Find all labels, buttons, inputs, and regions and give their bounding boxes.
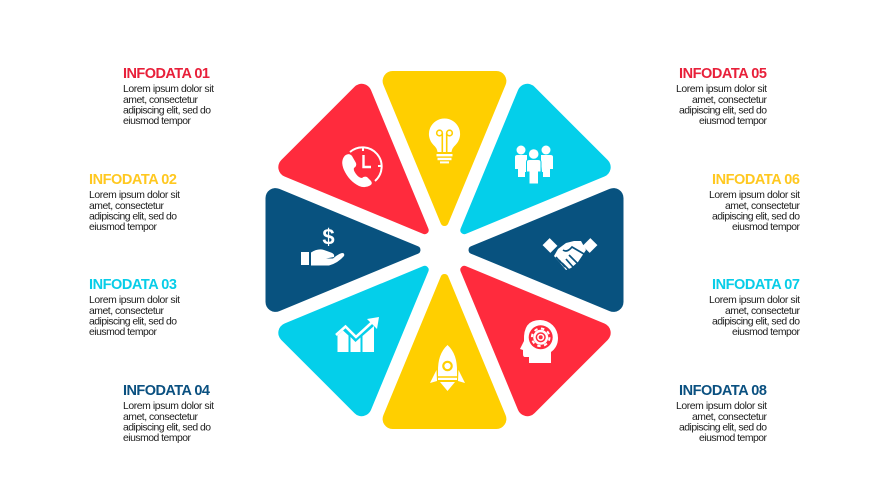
text block: infodata 02: INFODATA 02 [89,172,177,188]
text block: infodata 01: eiusmod tempor [123,116,192,127]
text block: infodata 05: INFODATA 05 [679,66,767,82]
text block: infodata 04: amet, consectetur [123,412,199,423]
text block: infodata 02: eiusmod tempor [89,222,158,233]
icon: hand with dollar: $ [322,224,335,250]
text block: infodata 03 [89,277,180,338]
text block: infodata 03: eiusmod tempor [89,327,158,338]
segment: red upper left [274,80,471,277]
text block: infodata 05: adipiscing elit, sed do [679,106,767,116]
text block: infodata 07 [709,277,801,338]
text block: infodata 06: eiusmod tempor [732,222,801,233]
text block: infodata 08: adipiscing elit, sed do [679,422,767,434]
text block: infodata 08: Lorem ipsum dolor sit [676,401,767,412]
text block: infodata 01: Lorem ipsum dolor sit [123,84,214,95]
text block: infodata 06: Lorem ipsum dolor sit [709,190,800,201]
text block: infodata 04 [123,383,214,444]
icon: head with gear [520,320,558,363]
icon: handshake [543,238,597,270]
text block: infodata 02: adipiscing elit, sed do [89,212,177,222]
text block: infodata 04: INFODATA 04 [123,383,210,399]
text block: infodata 01: INFODATA 01 [123,66,210,82]
icon: growth chart [336,317,379,352]
segment: cyan lower left [274,223,471,420]
text block: infodata 06 [709,172,801,233]
text block: infodata 08: amet, consectetur [692,412,768,423]
text block: infodata 07: Lorem ipsum dolor sit [709,295,800,306]
text block: infodata 03: INFODATA 03 [89,277,177,293]
text block: infodata 04: eiusmod tempor [123,433,192,444]
text block: infodata 01: amet, consectetur [123,95,199,106]
text block: infodata 05: amet, consectetur [692,95,768,106]
text block: infodata 07: amet, consectetur [725,306,801,317]
segment: navy right [469,188,624,312]
text block: infodata 03: Lorem ipsum dolor sit [89,295,180,306]
text block: infodata 07: adipiscing elit, sed do [712,316,800,328]
icon: hand with dollar [301,224,344,266]
segment: cyan upper right [418,80,615,277]
segment: navy left [265,188,420,312]
icon: team of people [515,146,553,184]
text block: infodata 07: eiusmod tempor [732,327,801,338]
segment: yellow top [383,71,506,226]
segment: red lower right [418,223,615,420]
text block: infodata 02 [89,172,180,233]
text block: infodata 08 [676,383,768,444]
text block: infodata 04: Lorem ipsum dolor sit [123,401,214,412]
text block: infodata 05: Lorem ipsum dolor sit [676,84,767,95]
icon: light bulb [429,118,460,163]
segment: yellow bottom [383,274,506,429]
text block: infodata 05: eiusmod tempor [699,116,768,127]
text block: infodata 02: amet, consectetur [89,201,165,212]
text block: infodata 01: adipiscing elit, sed do [123,106,211,116]
text block: infodata 06: amet, consectetur [725,201,801,212]
text block: infodata 07: INFODATA 07 [712,277,800,293]
text block: infodata 06: adipiscing elit, sed do [712,212,800,222]
text block: infodata 03: amet, consectetur [89,306,165,317]
text block: infodata 06: INFODATA 06 [712,172,800,188]
text block: infodata 08: INFODATA 08 [679,383,767,399]
icon: rocket [430,345,465,391]
icon: phone and clock [342,147,382,187]
text block: infodata 01 [123,66,214,127]
text block: infodata 03: adipiscing elit, sed do [89,316,177,328]
text block: infodata 04: adipiscing elit, sed do [123,422,211,434]
text block: infodata 08: eiusmod tempor [699,433,768,444]
text block: infodata 05 [676,66,768,127]
text block: infodata 02: Lorem ipsum dolor sit [89,190,180,201]
